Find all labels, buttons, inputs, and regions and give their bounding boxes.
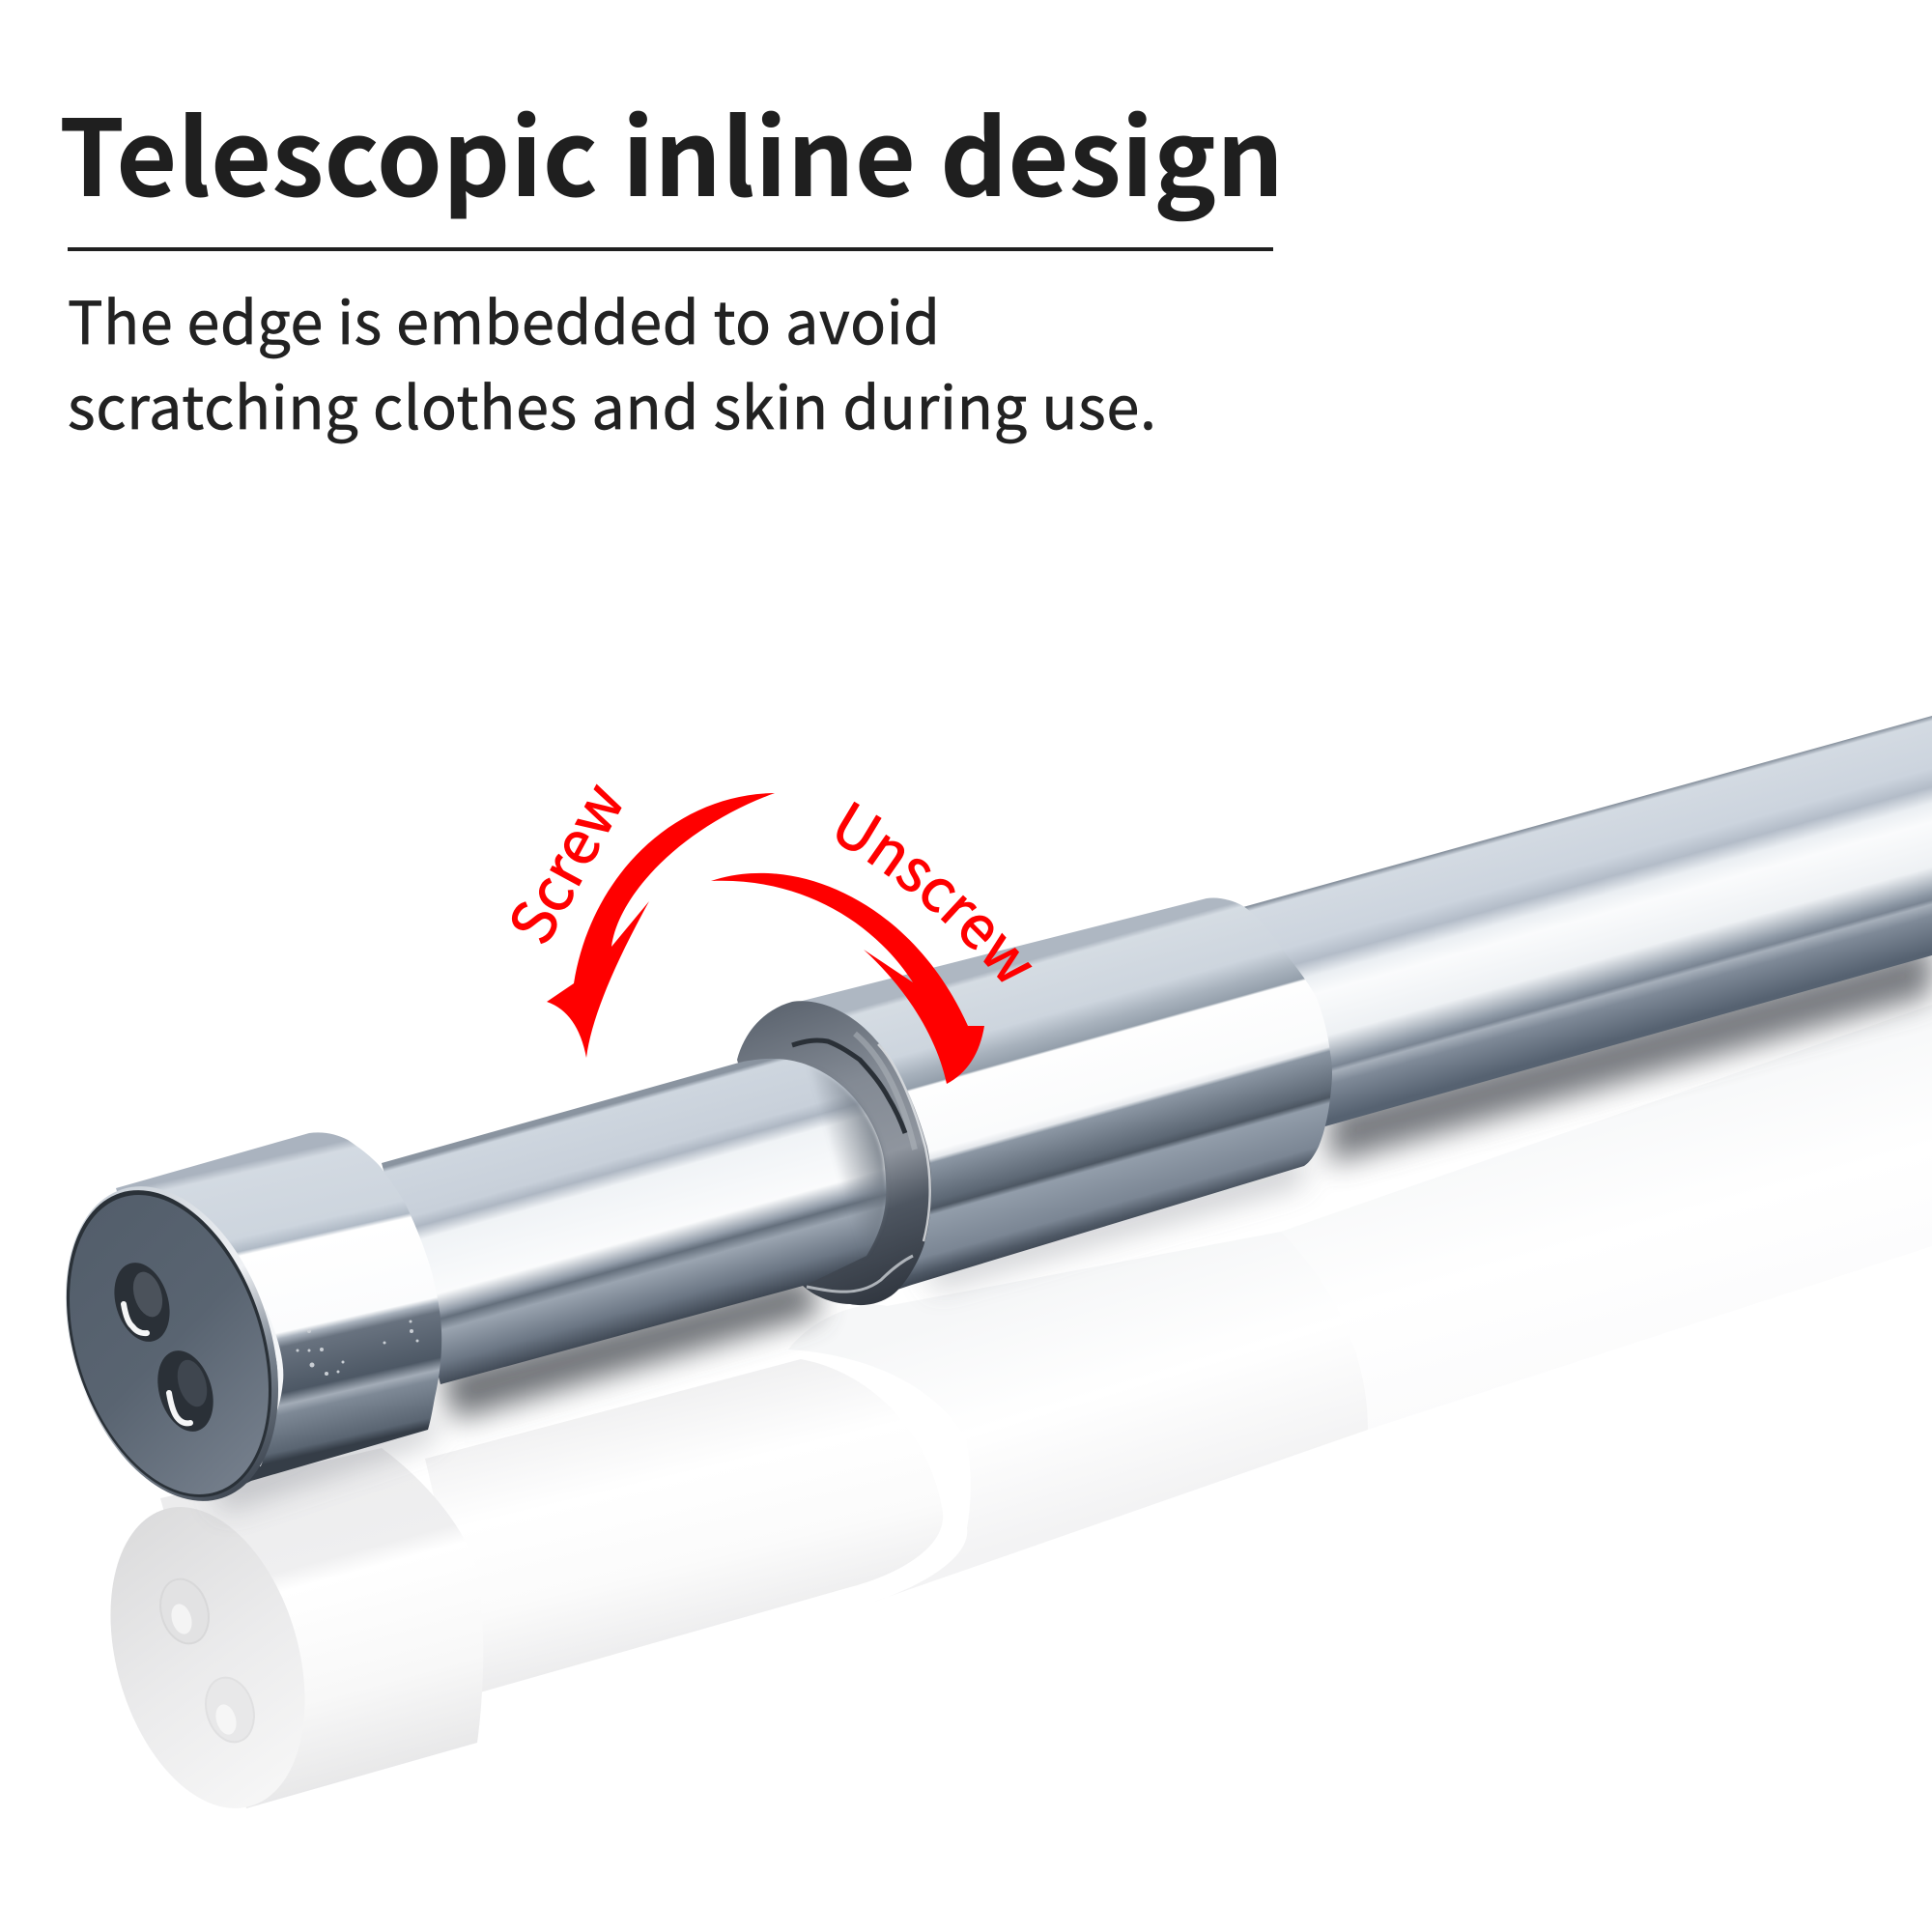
rod shadow	[213, 942, 1932, 1512]
end cap face	[28, 1159, 316, 1528]
description text: scratching clothes and skin during use.	[68, 360, 1156, 446]
screw hole upper	[105, 1256, 179, 1349]
cap bright edge	[258, 1311, 280, 1465]
heading underline	[68, 247, 1273, 251]
front rod section	[382, 1059, 886, 1384]
arrow: unscrew	[711, 873, 984, 1084]
end cap body	[116, 1132, 441, 1499]
chrome rod	[28, 716, 1932, 1528]
description text: The edge is embedded to avoid	[68, 275, 940, 361]
cap speckles	[296, 1320, 419, 1376]
middle collar sleeve	[738, 897, 1332, 1302]
description text	[68, 275, 1156, 446]
collar mouth ring	[737, 1001, 931, 1305]
screw hole lower	[149, 1344, 222, 1438]
label: Unscrew: Unscrew	[837, 802, 1032, 982]
arrow: screw	[547, 793, 775, 1058]
title: Telescopic inline design	[59, 75, 1284, 227]
floor reflection of rod	[78, 1005, 1932, 1832]
thin rear rod section	[1198, 716, 1932, 1135]
front rod end shading	[739, 1059, 886, 1300]
label: Screw: Screw	[512, 784, 622, 945]
